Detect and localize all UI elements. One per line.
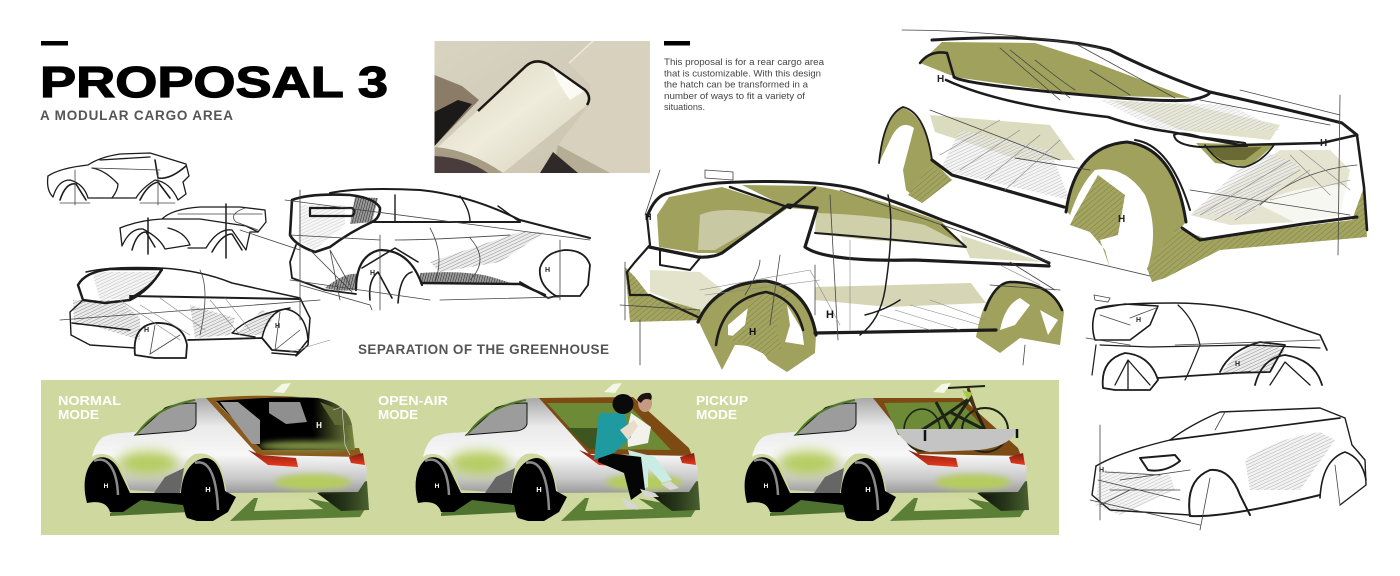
tailgate latches <box>925 429 1017 441</box>
sketch: three-quarter rear view C: H <box>144 327 149 334</box>
sketch: large side view D: H <box>370 270 375 277</box>
sketch: small front view F: H <box>1099 467 1104 474</box>
sketch: large side view D: H <box>545 267 550 274</box>
person: woman <box>627 393 679 490</box>
car: normal mode <box>85 383 369 521</box>
description text: This proposal is for a rear cargo area <box>664 56 825 67</box>
label: open-air mode: OPEN-AIR <box>378 394 448 408</box>
sketch: small front view F <box>1090 408 1366 530</box>
panel background <box>41 380 1059 535</box>
description text: number of ways to fit a variety of <box>664 90 805 101</box>
description accent bar <box>664 41 690 46</box>
label: pickup mode: PICKUP <box>696 394 748 408</box>
tailgate of pickup mode <box>896 429 1018 452</box>
description text: that is customizable. With this design <box>664 68 821 78</box>
people sitting on the open tailgate <box>594 393 679 510</box>
sketch: large olive rear three-quarter view: H <box>749 327 756 338</box>
label: pickup mode: MODE <box>696 408 737 422</box>
sketch: large olive front three-quarter view <box>879 30 1367 282</box>
label: open-air mode: MODE <box>378 408 418 422</box>
label: normal mode: MODE <box>58 408 99 422</box>
description text <box>664 56 825 112</box>
sketch: large olive rear three-quarter view: H <box>645 212 652 222</box>
title accent bar <box>41 41 68 46</box>
subtitle: A MODULAR CARGO AREA <box>40 108 233 123</box>
description text: the hatch can be transformed in a <box>664 78 809 90</box>
photo: hatch detail close-up <box>434 41 650 173</box>
car: open-air mode <box>416 383 700 521</box>
title: PROPOSAL 3 <box>40 58 388 107</box>
sketch: large olive rear three-quarter view: H <box>826 309 834 321</box>
sketch: large side view D <box>240 189 590 320</box>
heading: separation of the greenhouse: SEPARATION OF THE GREENHOUSE <box>358 342 609 357</box>
description text: situations. <box>664 101 705 112</box>
person: man <box>594 394 659 510</box>
label: open-air mode <box>378 394 448 422</box>
sketch: large olive rear three-quarter view <box>620 170 1064 372</box>
car: pickup mode <box>745 383 1029 521</box>
sketch: three-quarter rear view C: H <box>275 323 280 330</box>
car: normal mode: H <box>316 421 322 430</box>
sketch: large olive front three-quarter view: H <box>937 74 944 85</box>
sketch: three-quarter rear view C <box>60 268 330 358</box>
sketch: small rear side view E <box>1086 295 1327 390</box>
label: normal mode: NORMAL <box>58 394 121 408</box>
bicycle in the pickup bed <box>904 386 1008 452</box>
label: normal mode <box>58 394 121 422</box>
panel: modes strip <box>41 380 1059 535</box>
sketch: large olive front three-quarter view: H <box>1118 214 1125 225</box>
label: pickup mode <box>696 394 748 422</box>
sketch: small rear side view E: H <box>1136 317 1141 324</box>
sketch: small side view B <box>120 204 266 258</box>
sketch: large olive front three-quarter view: H <box>1320 138 1327 149</box>
sketch: small rear side view E: H <box>1235 361 1240 368</box>
sketch: small side view A <box>48 153 189 205</box>
